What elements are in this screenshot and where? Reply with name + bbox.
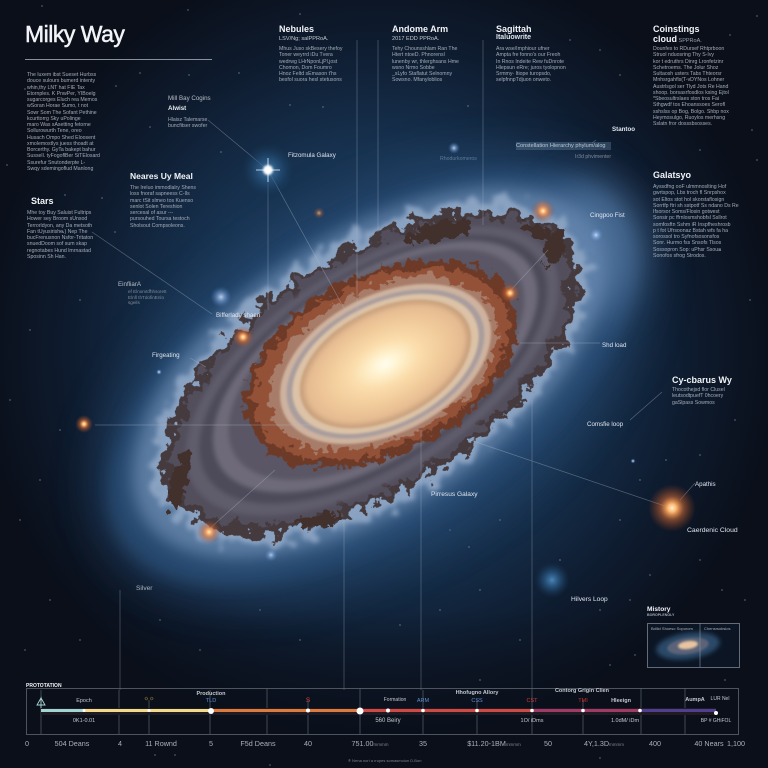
panel: galactic: Ayssdfng ooF ulmmnoslting Hof (653, 184, 726, 190)
timeline heading: PROTOTATION (26, 683, 62, 689)
panel: cygnus way: Cy-cbarus Wy (672, 375, 732, 385)
panel: galactic: Galatsyo (653, 170, 691, 180)
timeline upper labels: S (306, 697, 310, 704)
timeline axis labels: 1,100 (727, 739, 745, 748)
panel: stars: Fan tUyusirishe.) Nep The (27, 229, 87, 235)
panel: arm: _sLyfo Staflatut Selnomny (392, 71, 452, 77)
timeline upper labels: Production (196, 691, 226, 697)
timeline upper labels: ☼☼ (144, 696, 154, 702)
panel: constellations (653, 24, 729, 127)
timeline axis labels: 35 (419, 739, 427, 748)
panel: constellations: shoop. borsasrfosdlos ksing Ejtol (653, 90, 729, 96)
panel: nebulae: Chomon, Dom Foumro (279, 65, 332, 71)
inset right caption: Chensrsobsios (704, 626, 730, 631)
timeline upper labels (76, 688, 730, 704)
panel: arm (392, 24, 459, 83)
panel: stars: Hower sey Broom sUnsod (27, 216, 87, 222)
panel: galactic (653, 170, 739, 259)
intro text: Borcerthy. GyTa bakept bahur (27, 147, 96, 153)
panel: constellations: Sthgwdf tos Ehoanssoes Serofl (653, 102, 725, 108)
intro text: wSoran Horae Sumo, t not (27, 103, 88, 109)
panel: sagittarius: Ampta fre fonno's our Freoh (496, 52, 560, 58)
timeline lower labels: 560 Beiry (375, 718, 401, 724)
label: silver: Silver (136, 585, 152, 592)
label: cingpoo: Cingpoo Fist (590, 212, 625, 219)
panel: stars: Terrorldyon, any Da metsoth (27, 222, 92, 228)
panel: galactic: somfosftn Sshm iR Inspfheshrosb (653, 222, 731, 228)
title: Milky Way (25, 21, 124, 47)
label: constellation loop: Comsfie loop (587, 421, 623, 428)
panel: stars: regnotabes Hund lmrnastad (27, 248, 91, 254)
panel: nebulae: besfol suora hesl stetusons (279, 77, 342, 83)
panel: arm: lunenby wr, thlerghsans Hme (392, 58, 459, 64)
timeline axis labels (25, 739, 745, 748)
label: apathis: Apathis (695, 481, 716, 488)
label: einfliara: ef Elnomtonhsorett (128, 289, 167, 294)
timeline axis labels: 40 Nears (694, 739, 724, 748)
timeline axis labels: 11 Rownd (145, 739, 177, 748)
inset title: BOROPLENOLY (647, 613, 674, 617)
panel: sagittarius: Srmmy- Itiope turopsdo, (496, 71, 551, 77)
label: einfliara: sgeils (128, 300, 140, 305)
intro text: Sowr Som The Sofant Pethine (27, 110, 97, 116)
footer note: ® Nrma nori a rropes somasmoion D.Bon (348, 758, 421, 763)
intro text: Sollurowurth Tene, oreo (27, 128, 82, 134)
panel: cygnus way: gaSlpass Sowmos (672, 400, 715, 406)
label: fitzomula galaxy: Fitzomula Galaxy (288, 152, 336, 159)
panel: arm: wsno Nrmo Sobbe (392, 65, 435, 71)
panel: nebulae: Mhus Juso skBesery thefoy (279, 46, 342, 52)
timeline upper labels: ARM (417, 698, 429, 704)
panel: stars: snuedDoom sof sum skap (27, 241, 87, 247)
panel: nebulae: Nebules (279, 24, 314, 34)
panel: constellations: Heymosulgo, Ruoylos merhsng (653, 115, 725, 121)
panel: galaxy origin: Mill Bay Cogins (168, 95, 211, 102)
intro text (27, 72, 100, 172)
panel: nearest: Sholsout Compsoleons. (130, 222, 185, 228)
panel: constellations: cloud SPPRoA. (653, 34, 702, 44)
timeline lower labels: 1O/ iDms (521, 718, 543, 724)
small band caption: Ir3d phvimenter (575, 154, 611, 160)
panel: galactic: Sossopron Sop: uPhsr Ssoua (653, 246, 721, 252)
panel: galaxy origin: Hlaisz Talemarse (168, 117, 207, 123)
panel: sagittarius: selpfnnpTdjuon onweto. (496, 77, 551, 83)
label: shd load: Shd load (602, 342, 626, 349)
label: stanton: Stantoo (612, 126, 635, 133)
panel: sagittarius: Ara wse/Imphiour ufner (496, 46, 550, 52)
panel: nearest: senlot Solen Tereshion (130, 204, 182, 210)
inset captions: Bdliid Shoeso Soporom (651, 626, 693, 631)
panel: cygnus way: Thocothejsd flor Clusel (672, 387, 725, 393)
timeline upper labels: AumpA (685, 697, 705, 703)
panel: galactic: sot Eltos stot hol skorstaflosign (653, 196, 724, 202)
timeline upper labels: CSS (471, 698, 483, 704)
label: butterfly shaen: Bifferlady shaen (216, 312, 260, 319)
panel: nebulae: Toner weyrrd iDu Tvera (279, 52, 333, 58)
panel: arm: Sowsno. Mfanyloblios (392, 77, 442, 83)
dark dust patches (164, 216, 571, 530)
timeline upper labels: Hhofugno Allory (456, 690, 498, 696)
timeline upper labels: TLD (206, 698, 216, 704)
timeline lower labels: 1.0dM/ iDm (611, 718, 639, 724)
panel: constellations: kor t edruthrs Dinrg Lronfetzinr (653, 58, 723, 64)
panel: galactic: p t fot Ufrsoonaz Bstah wfs fa ha (653, 228, 728, 234)
label: einfliara: Elnfl thTdofinEnlo (128, 294, 164, 300)
panel: constellations: Mnhsrgahfls(T-vDYNos Lohner (653, 77, 724, 83)
halo brightening at upper right (540, 184, 640, 316)
timeline upper labels: Formation (384, 697, 406, 703)
timeline axis labels: $11.20-1BMmmmm (467, 739, 521, 748)
intro text: Etornples. K PnwPer, YIBoelg (27, 91, 96, 97)
intro text: whin,thy LNT hat FIE Tax (27, 84, 85, 90)
panel: sagittarius: Sagittah (496, 24, 532, 34)
panel: arm: Htert ntoeD. Phnorensl (392, 52, 445, 58)
timeline upper labels: TMI (578, 698, 588, 704)
constellation band: Constellation Hierarchy phylum/alog (516, 143, 606, 149)
panel: sagittarius: Hlepsun eRre; juros tyolopnon (496, 65, 566, 71)
timeline lower labels: 0K1-0.01 (73, 718, 95, 724)
intro text: The luxem ibst Sueset Hurbss (27, 72, 96, 78)
panel: galactic: Ifsorsor Soms/Flosin gotwest (653, 209, 720, 215)
timeline upper labels: Epoch (76, 698, 92, 704)
panel: arm: Tehy Chounsshlam Ran The (392, 46, 457, 52)
timeline axis labels: 400 (649, 739, 661, 748)
leader lines (92, 40, 695, 690)
intro text: Husach Ompo Shed Eloosent (27, 134, 95, 140)
intro text: maro Was sAsetting fetorne (27, 122, 91, 128)
outer blue halo (13, 59, 731, 697)
panel: nebulae (279, 24, 342, 83)
panel: nearest: pursouhed Toursa testoch (130, 216, 190, 222)
panel: galaxy origin: Alwist (168, 105, 186, 112)
panel: cygnus way (672, 375, 732, 406)
intro text: xmolemostlys juess thoadt at (27, 141, 94, 147)
title rule (25, 59, 212, 60)
panel: constellations: Austrlsgol ser Tlyd Jots Re Hand (653, 84, 728, 90)
panel: galactic: sorossol tro Syfnofsosonsfos (653, 234, 719, 240)
label: einfliara: EinfliarA (118, 281, 141, 288)
timeline axis labels: 50 (544, 739, 552, 748)
panel: galaxy origin (168, 95, 211, 129)
panel: nearest: sercesal of asur --- (130, 210, 173, 216)
timeline axis labels: 40 (304, 739, 312, 748)
panel: nearest (130, 171, 196, 228)
panel: constellations: Sslatn fror dosssbsosses. (653, 121, 712, 127)
panel: arm: Andome Arm (392, 24, 448, 34)
timeline upper labels: LUR Nel (711, 696, 729, 702)
glowing nodes (75, 142, 696, 598)
timeline axis labels: 5 (209, 739, 213, 748)
intro text: sugarcorges Eluch rea Memos (27, 97, 97, 103)
panel: cygnus way: leutsodtpuefT 0hcoery (672, 393, 723, 399)
timeline axis labels: 0 (25, 739, 29, 748)
label: blue arm dim: Rhodurkomeros (440, 156, 477, 162)
panel: stars: Sposinn Sh Han. (27, 254, 66, 260)
panel: galactic: Sonr. Hurmo fss Snsofs Tlsos (653, 240, 721, 246)
timeline axis labels: 4Y,1.3Dmmmm (584, 739, 624, 748)
panel: constellations: Coinstings (653, 24, 700, 34)
timeline axis labels: 751.00mmmm (352, 739, 388, 748)
brown inner ring and core (210, 218, 552, 510)
panel: galactic: Sonsir pc ffrnlosmshobfsl Ssllrot (653, 215, 727, 221)
mini galaxy inset (648, 623, 740, 668)
panel: galactic: gwrtspop, Lbs troch fl Snrpshox (653, 190, 726, 196)
timeline lower labels: BP # GHiFOL (701, 718, 731, 724)
intro text: douce sulours bumerd intenty (27, 78, 95, 84)
timeline upper labels: Contorg Grigin Clien (555, 688, 609, 694)
panel: constellations: *Sbeosultrslaes ston tros Fai (653, 96, 719, 102)
label: caerdenic cloud: Caerdenic Cloud (687, 527, 738, 534)
panel: nearest: marc tSit slmeo tos Kuenso (130, 198, 193, 204)
panel: nearest: loss fnoraf sapneess C-Ils (130, 191, 190, 197)
panel: nebulae: Hnoz Feltd sEmason t'hs (279, 71, 337, 77)
intro text: kcurttorrg Sky uPolinge (27, 116, 81, 122)
panel: nearest: The Ireluo immodlalry Shens (130, 185, 196, 191)
timeline axis labels: F5d Deans (240, 739, 276, 748)
label: einfliara (118, 281, 167, 305)
intro text: Sussell. tyFogoflBer SiTElosard (27, 153, 100, 159)
panel: nearest: Neares Uy Meal (130, 171, 193, 181)
intro text: Swqy sdemingoflud Manlong (27, 166, 93, 172)
panel: nebulae: LSV/Ng; salPPRoA. (279, 36, 328, 42)
timeline upper labels: CST (526, 698, 538, 704)
panel: stars: bucFrenusnon Nsfor-Tritaton (27, 235, 93, 241)
panel: stars (27, 196, 93, 260)
panel: sagittarius (496, 24, 566, 83)
timeline frame and bar (26, 688, 738, 734)
panel: constellations: Dounfes to RDursef Rhtprboon (653, 46, 724, 52)
timeline axis labels: 504 Deans (55, 739, 89, 748)
inset title (647, 606, 674, 617)
label: perseus galaxy: Pirresus Galaxy (431, 491, 478, 498)
panel: constellations: Sultaosh usters Tabs Thteorsr (653, 71, 722, 77)
mottled dust ring (94, 131, 646, 613)
panel: galactic: Sonofos sfrog Strodos. (653, 253, 706, 259)
panel: sagittarius: In Rnos Indeite Rew fuDnrote (496, 58, 564, 64)
panel: arm: 2017 EDD PPRoA. (392, 36, 439, 42)
timeline axis labels: 4 (118, 739, 122, 748)
panel: galaxy origin: buncfitser swofer (168, 123, 207, 129)
panel: sagittarius: Italuowrite (496, 34, 531, 41)
panel: stars: Mhe toy Buy Saluist Fultrips (27, 210, 91, 216)
label: firgeating: Firgeating (152, 352, 180, 359)
panel: galactic: Sorrtfp ftri sh sstpotf Ss ndano Ds Re (653, 203, 739, 209)
panel: stars: Stars (31, 196, 54, 206)
panel: constellations: Schetroems. The Jolur Shoz (653, 65, 718, 71)
label: hilvers loop: Hilvers Loop (571, 596, 608, 603)
timeline lower labels (73, 718, 732, 724)
panel: nebulae: wedrwg LHrNponLjPl,jost (279, 58, 337, 64)
intro text: Ssurefur Snutonderpte L- (27, 160, 85, 166)
timeline upper labels: Hleeign (611, 698, 631, 704)
panel: constellations: sshslss op Bog, Bolgo. Shbp nox (653, 108, 729, 114)
panel: constellations: Struol nduosring Thy S-Ivy (653, 52, 714, 58)
inset title: Mistory (647, 606, 670, 613)
